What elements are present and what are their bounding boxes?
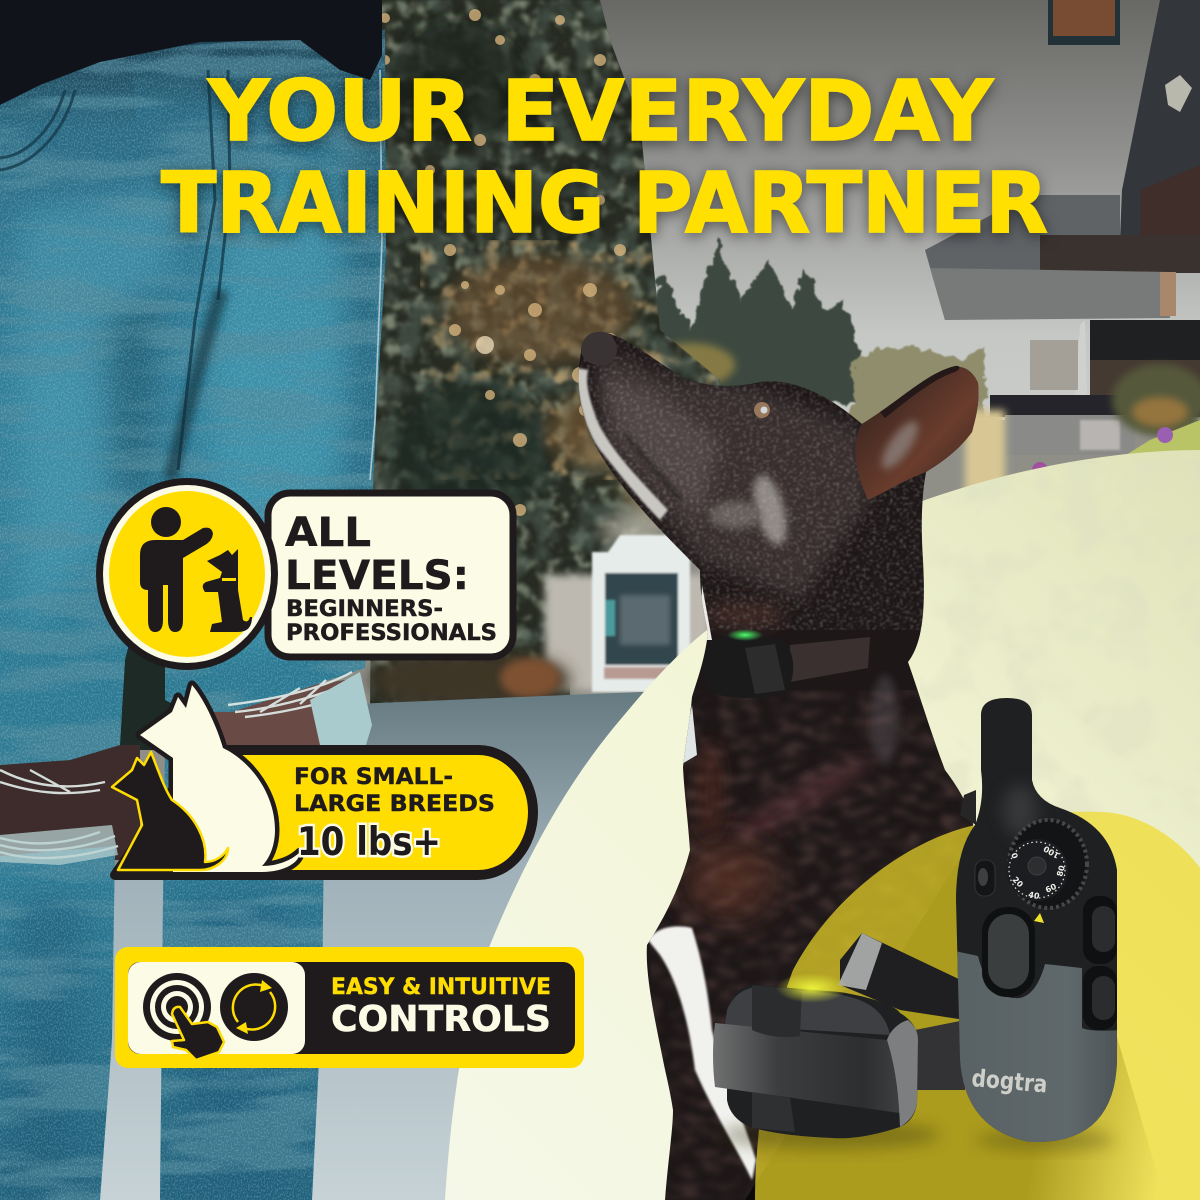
badge: easy and intuitive controls	[115, 947, 584, 1068]
badge text: LEVELS:	[285, 553, 469, 599]
sky and building wall	[560, 0, 1200, 420]
building	[925, 0, 1200, 455]
pale translucent arc panel	[445, 450, 1200, 1200]
upper right leg	[130, 30, 386, 712]
badge text: BEGINNERS-	[286, 597, 443, 622]
remote dial: 0	[1009, 852, 1020, 860]
remote brand wordmark: dogtra	[970, 1064, 1049, 1099]
pockets and seams	[0, 70, 230, 470]
badge text: PROFESSIONALS	[286, 621, 497, 646]
receiver body	[727, 985, 918, 1138]
title: TRAINING PARTNER	[161, 154, 1048, 252]
dark gap between legs	[115, 480, 175, 750]
badge text	[285, 510, 497, 646]
remote side buttons	[1083, 896, 1117, 1030]
circle medallion	[96, 478, 278, 670]
badge text: LARGE BREEDS	[294, 792, 495, 817]
remote dial: 20	[1011, 875, 1025, 890]
remote dial: 80	[1055, 864, 1067, 878]
dog eye and nose	[754, 402, 770, 418]
lower left leg	[0, 846, 115, 1200]
faint foliage showing through pale panel	[948, 772, 964, 792]
white lip along lower jaw	[577, 368, 668, 520]
road	[100, 692, 720, 1200]
white wall and bushes	[370, 575, 710, 710]
dog wearing collar	[703, 629, 870, 698]
pill	[115, 750, 533, 875]
badge text: FOR SMALL-	[294, 765, 453, 790]
bokeh highlights	[382, 9, 626, 516]
icon: touch rings and hand	[143, 973, 224, 1060]
icon: large cream dog	[140, 685, 300, 872]
title: YOUR EVERYDAY	[207, 62, 994, 160]
remote LED window	[975, 860, 995, 896]
frayed threads	[0, 672, 358, 858]
title	[161, 62, 1048, 252]
badge text: ALL	[285, 510, 371, 556]
remote grey lower shell	[950, 784, 1120, 1150]
dog	[577, 330, 980, 1200]
dog fur shading	[577, 330, 980, 1200]
shaded zone under yellow panel	[745, 835, 1165, 1200]
mouth line	[625, 435, 680, 500]
jeans: person's legs	[0, 0, 390, 1200]
lighter frayed hem patch	[310, 672, 372, 745]
icon: small dark dog	[112, 752, 228, 870]
icon: person training dog	[140, 507, 252, 632]
badge text: EASY & INTUITIVE	[331, 974, 551, 1000]
badge text	[294, 765, 495, 865]
dark shirt at waist	[0, 0, 382, 105]
remote dial: 100	[1042, 844, 1061, 860]
remote dial: 60	[1044, 882, 1058, 895]
sidewalk sign	[592, 535, 690, 692]
text box	[268, 493, 513, 657]
large tree mass	[370, 0, 720, 720]
dog ear	[855, 367, 978, 500]
remote dial: 40	[1028, 890, 1041, 901]
denim texture and fades	[0, 30, 390, 1200]
badge: all levels	[96, 478, 513, 670]
remote triangle marker	[1034, 913, 1044, 923]
remote main button	[982, 907, 1035, 997]
remote dial	[1006, 820, 1087, 908]
collar LED glow	[776, 973, 848, 1003]
product: handheld remote	[950, 698, 1120, 1150]
white throat and chest marks	[702, 585, 712, 640]
badge text: 10 lbs+	[297, 820, 441, 865]
distant pine trees and bushes	[640, 240, 1200, 500]
product: collar receiver	[713, 933, 965, 1149]
lower right leg	[160, 745, 325, 1200]
icon: rotating arrows	[220, 973, 288, 1041]
upper left leg	[0, 40, 170, 765]
collar strap	[840, 933, 965, 1020]
badge: easy and intuitive controls: CONTROLS	[331, 999, 551, 1040]
yellow translucent circle panel	[755, 812, 1200, 1200]
skin through knee tears	[0, 745, 140, 860]
badge: small to large breeds	[112, 685, 533, 875]
